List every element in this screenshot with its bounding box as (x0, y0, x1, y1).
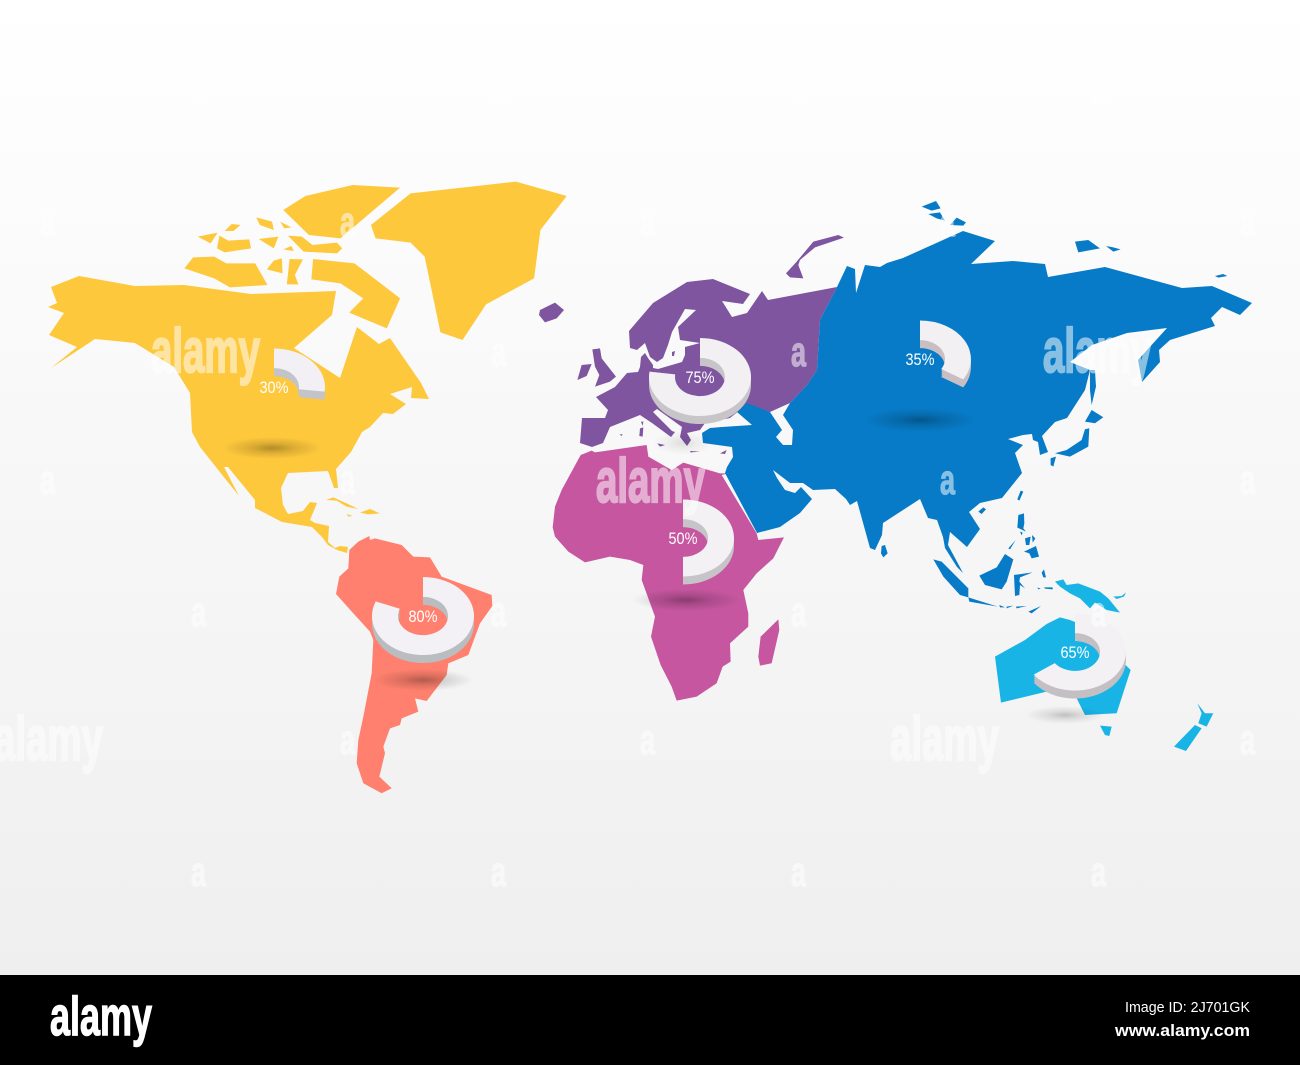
region: Oceania (995, 579, 1213, 751)
watermark layer: a (640, 198, 655, 245)
donut chart: North America 30% (260, 348, 325, 400)
watermark layer: a (1091, 588, 1106, 635)
watermark layer: alamy (1043, 317, 1152, 386)
donut chart: Asia 35% (906, 320, 971, 387)
watermark layer: a (340, 456, 355, 503)
watermark layer: a (791, 66, 806, 113)
watermark layer: a (340, 716, 355, 763)
donut chart: North America 30%: 30% (259, 379, 289, 397)
website: www.alamy.com (1114, 1021, 1250, 1040)
watermark layer: a (940, 198, 955, 245)
watermark layer: alamy (890, 705, 999, 774)
donut chart: Oceania 65%: 65% (1060, 644, 1090, 662)
watermark layer: a (40, 456, 55, 503)
region: Europe (539, 235, 844, 454)
watermark layer: a (791, 848, 806, 895)
footer logo: alamy (50, 985, 152, 1047)
image id: Image ID: 2J701GK (1125, 999, 1250, 1016)
watermark layer: a (191, 848, 206, 895)
shadow: Oceania pie (1025, 706, 1105, 724)
donut chart: Africa 50% (668, 499, 734, 585)
region: North America and Greenland (48, 182, 567, 553)
region: Asia (702, 201, 1252, 613)
region: Africa (553, 445, 784, 701)
shadow: Africa pie (632, 589, 740, 611)
footer band (0, 975, 1300, 1065)
donut chart: Europe 75% (649, 338, 751, 424)
region: South America (336, 536, 492, 793)
watermark layer: a (1091, 66, 1106, 113)
shadow: Asia pie (864, 408, 976, 432)
watermark layer: a (791, 588, 806, 635)
watermark layer: a (1240, 716, 1255, 763)
watermark layer: a (791, 328, 806, 375)
shadow: North America pie (222, 437, 322, 459)
donut chart: Europe 75%: 75% (685, 369, 715, 387)
watermark layer: a (40, 198, 55, 245)
donut chart: Oceania 65% (1034, 613, 1126, 699)
watermark layer: a (1240, 456, 1255, 503)
watermark layer: a (340, 198, 355, 245)
watermark layer: a (191, 66, 206, 113)
watermark layer (0, 66, 1255, 895)
shadow: South America pie (373, 669, 473, 691)
shadow: Europe pie (653, 431, 713, 455)
donut chart: Africa 50%: 50% (668, 530, 698, 548)
donut chart: South America 80% (372, 577, 474, 663)
donut chart: Asia 35%: 35% (905, 351, 935, 369)
watermark layer: a (491, 848, 506, 895)
watermark layer: a (491, 588, 506, 635)
watermark layer: a (191, 588, 206, 635)
watermark layer: a (940, 456, 955, 503)
watermark layer: alamy (151, 317, 260, 386)
watermark layer: a (640, 716, 655, 763)
watermark layer: a (491, 66, 506, 113)
watermark layer: a (491, 328, 506, 375)
watermark layer: alamy (596, 447, 705, 516)
watermark layer: a (1240, 198, 1255, 245)
watermark layer: a (1091, 848, 1106, 895)
donut chart: South America 80%: 80% (408, 608, 438, 626)
